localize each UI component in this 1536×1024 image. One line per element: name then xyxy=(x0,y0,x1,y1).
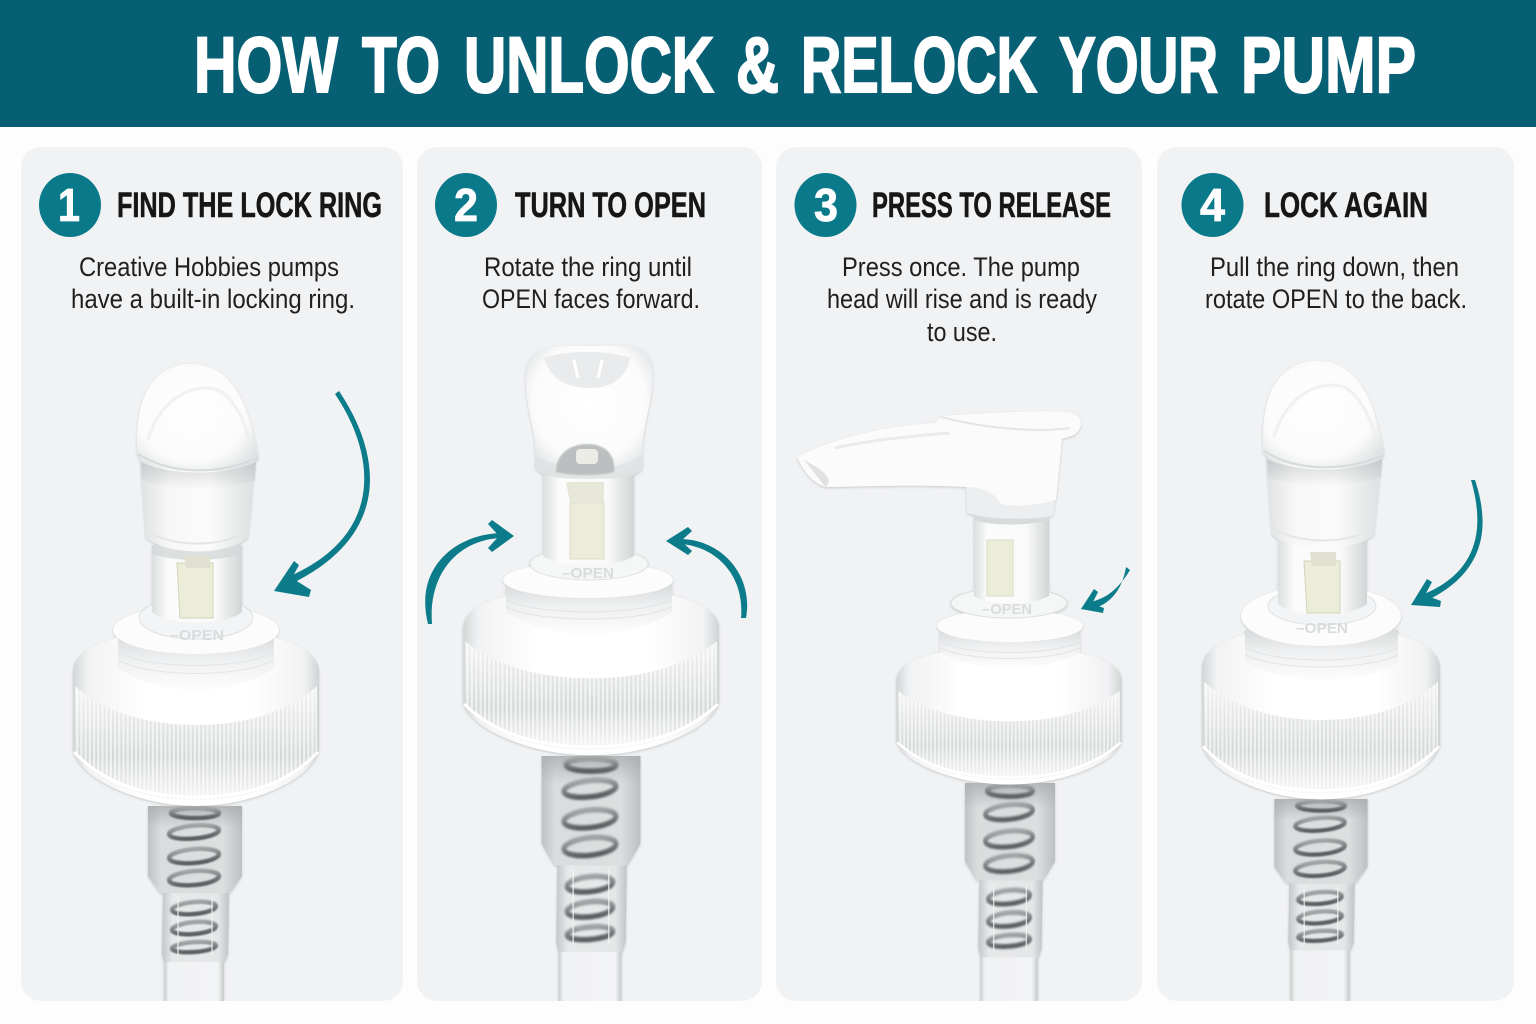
arrow: points down to ring xyxy=(1411,480,1483,607)
panel: step 2 turn to open xyxy=(417,147,762,1024)
step 4 number badge xyxy=(1182,173,1244,237)
step 1 description xyxy=(71,252,355,314)
panel: step 1 find the lock ring xyxy=(21,147,403,1024)
step 4 description xyxy=(1205,252,1467,314)
arrow: points to ring xyxy=(1081,567,1130,613)
ring label OPEN: –OPEN xyxy=(170,627,224,644)
ring label OPEN: –OPEN xyxy=(982,601,1032,618)
arrow: points to lock ring xyxy=(274,391,370,597)
step 2 heading: TURN TO OPEN xyxy=(515,185,706,225)
step 3 description: to use. xyxy=(927,317,997,347)
pump photo 3 head released xyxy=(797,411,1122,1024)
arrow: rotate left xyxy=(666,527,747,618)
step 1 description: have a built-in locking ring. xyxy=(71,284,355,314)
pump head side view with spout xyxy=(797,411,1081,519)
ring label OPEN: –OPEN xyxy=(562,565,614,582)
panel: step 3 press to release xyxy=(776,147,1142,1024)
step 3 description: Press once. The pump xyxy=(842,252,1080,282)
step 4 heading: LOCK AGAIN xyxy=(1264,185,1428,225)
step 4 description: Pull the ring down, then xyxy=(1210,252,1459,282)
pump photo 4 relocked xyxy=(1202,361,1440,1024)
step 1 heading: FIND THE LOCK RING xyxy=(117,185,382,225)
step 3 description: head will rise and is ready xyxy=(827,284,1098,314)
pump head front view xyxy=(526,346,653,479)
title: & xyxy=(736,20,779,109)
title: TO xyxy=(362,20,440,109)
step 2 number badge xyxy=(435,173,497,237)
pump photo 1 locked xyxy=(73,364,319,1024)
title: HOW xyxy=(194,20,338,109)
title: YOUR xyxy=(1059,20,1218,109)
step 3 number badge xyxy=(794,173,856,237)
step 1 number badge xyxy=(39,173,101,237)
title: PUMP xyxy=(1241,20,1416,109)
step 3 heading: PRESS TO RELEASE xyxy=(872,185,1111,225)
step 2 description: OPEN faces forward. xyxy=(482,284,700,314)
pump photo 2 head facing forward xyxy=(463,346,719,1024)
ring label OPEN: –OPEN xyxy=(1296,620,1348,637)
arrow: rotate right xyxy=(425,520,514,624)
step 4 description: rotate OPEN to the back. xyxy=(1205,284,1467,314)
step 3 number badge: 3 xyxy=(814,179,838,231)
step 4 number badge: 4 xyxy=(1200,179,1225,231)
step 1 number badge: 1 xyxy=(58,179,80,231)
step 2 description xyxy=(482,252,700,314)
step 2 number badge: 2 xyxy=(454,179,478,231)
title: UNLOCK xyxy=(464,20,714,109)
header banner xyxy=(0,0,1536,127)
panel: step 4 lock again xyxy=(1157,147,1514,1024)
title xyxy=(194,20,1416,109)
step 3 description xyxy=(827,252,1098,347)
step 2 description: Rotate the ring until xyxy=(484,252,692,282)
title: RELOCK xyxy=(801,20,1037,109)
step 1 description: Creative Hobbies pumps xyxy=(79,252,339,282)
